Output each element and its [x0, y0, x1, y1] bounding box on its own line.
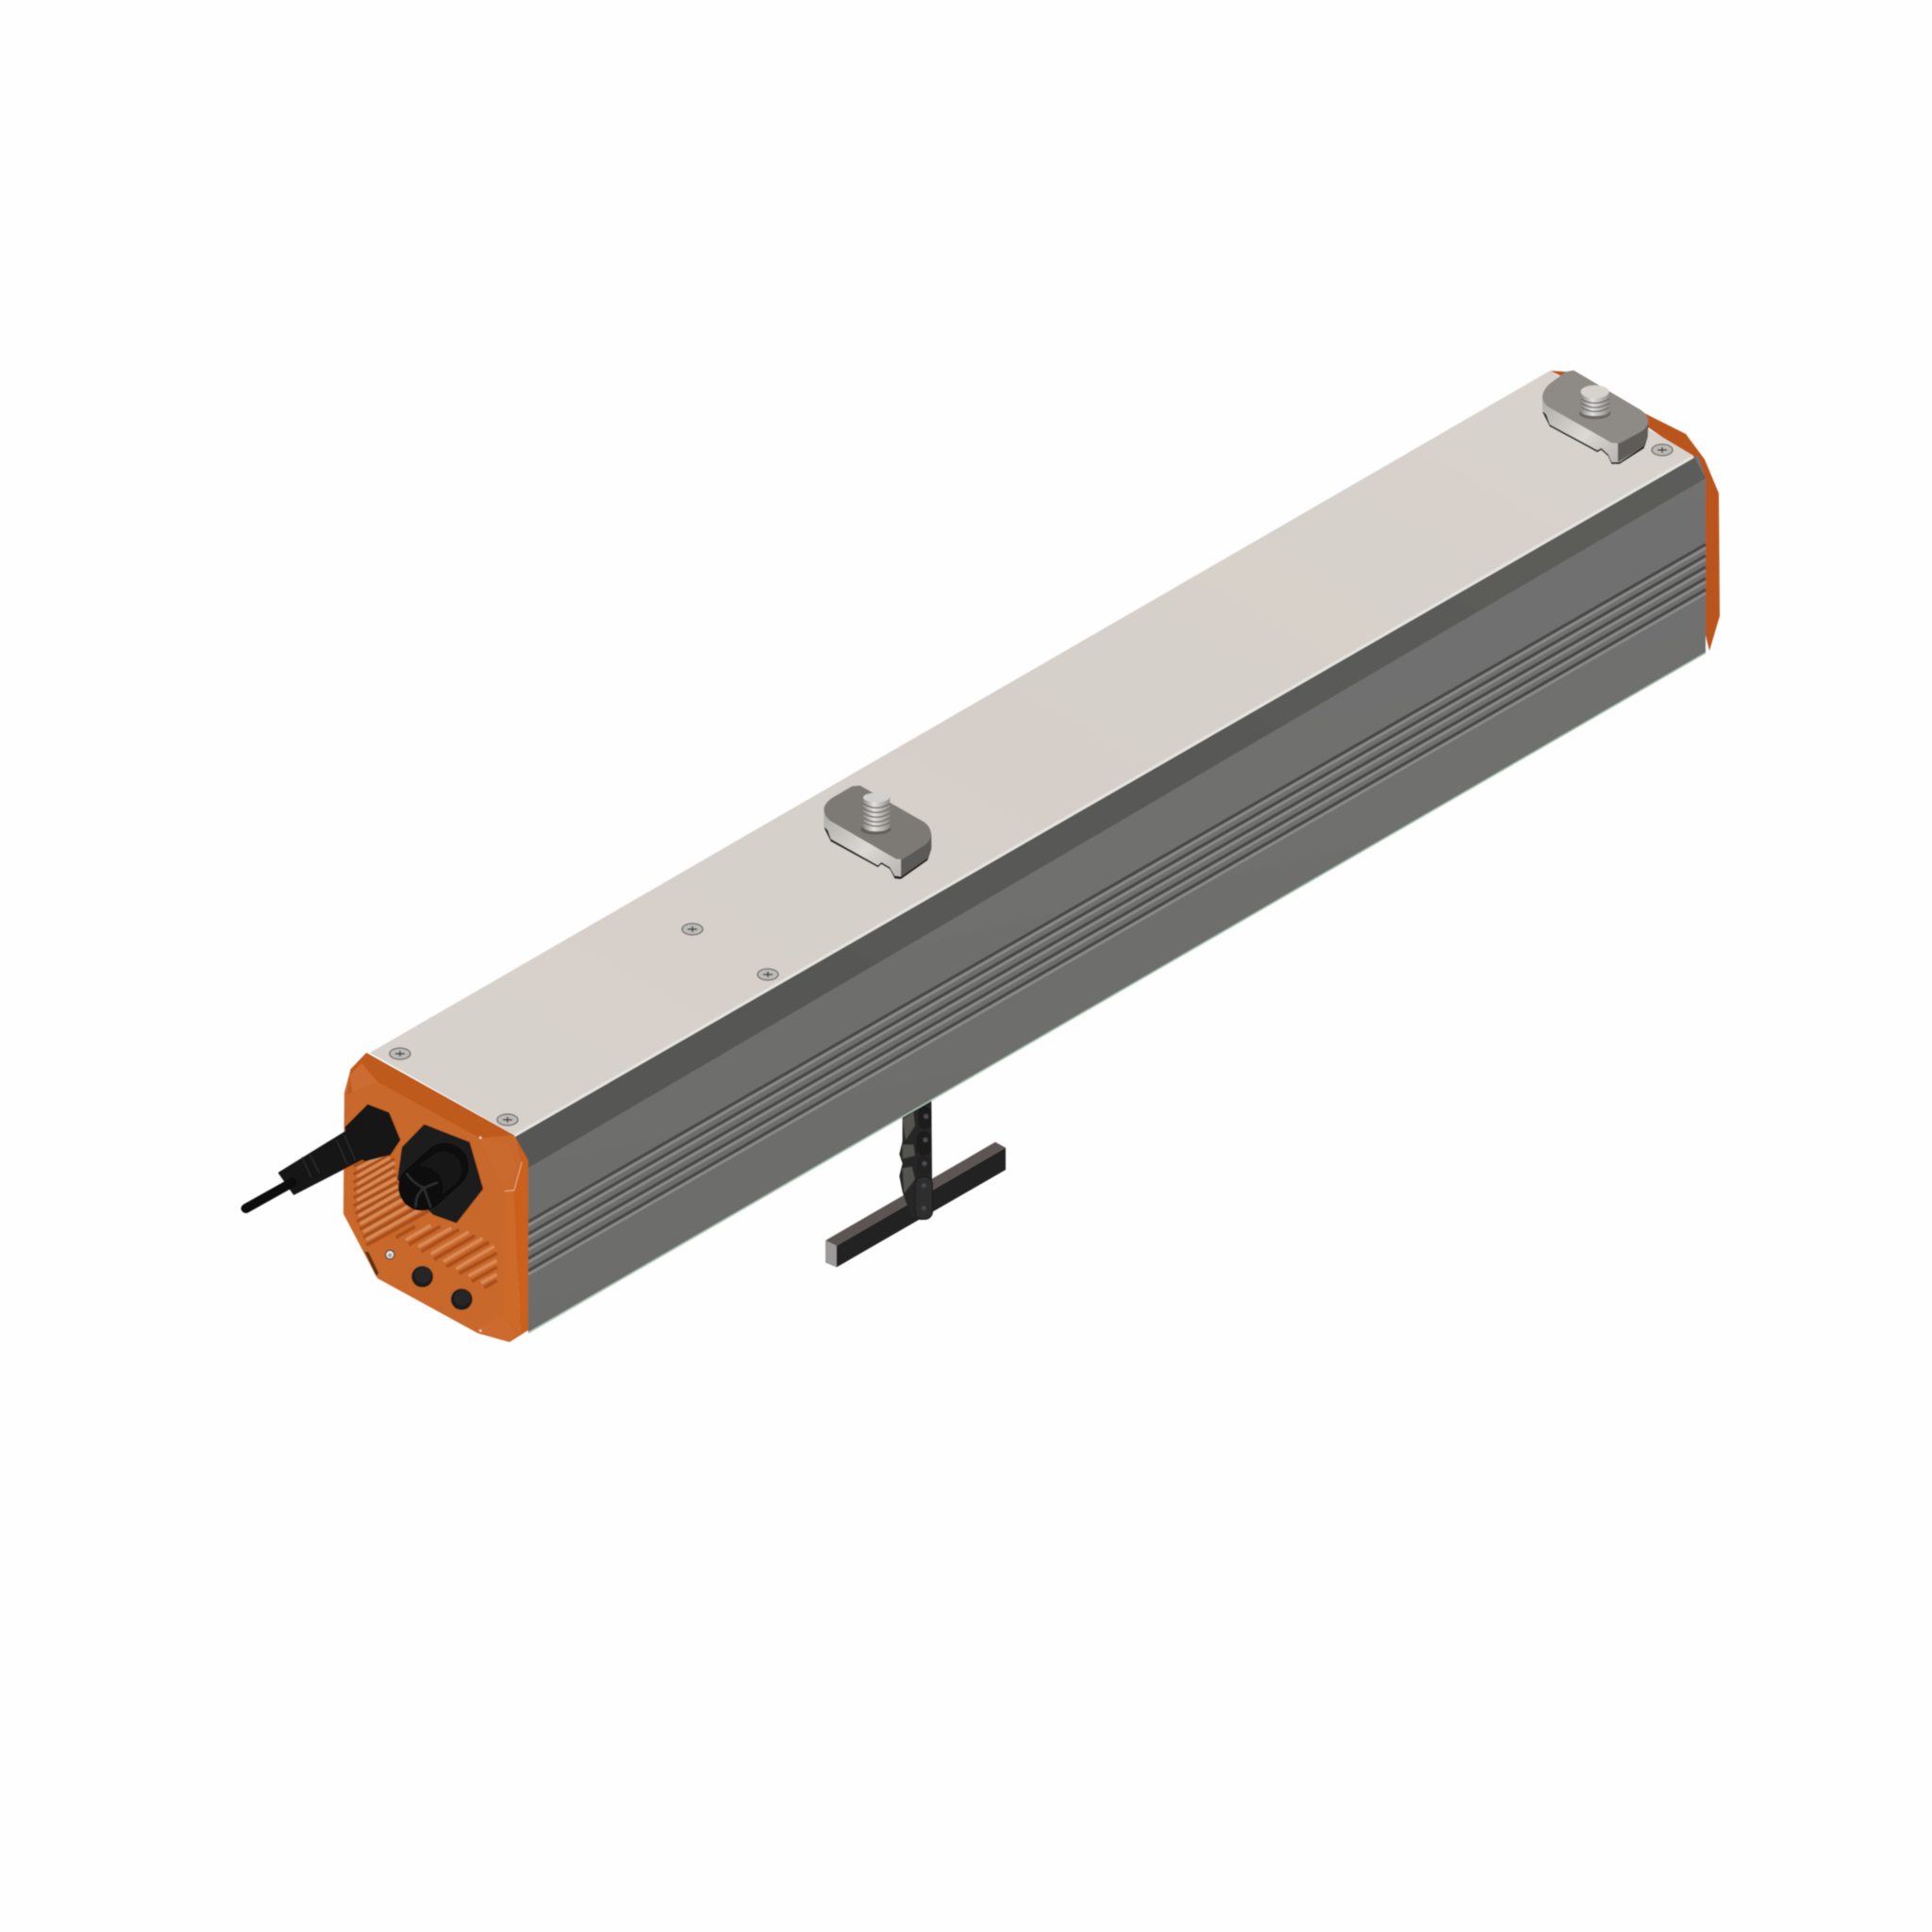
status LED	[386, 1250, 394, 1259]
vent slats upper	[354, 1151, 441, 1245]
cable plug nut	[346, 1106, 399, 1160]
mounting bracket: far	[1542, 371, 1648, 464]
corner facets	[350, 1063, 377, 1092]
cap face	[343, 1053, 522, 1342]
side grooves	[528, 544, 1706, 1274]
front end cap	[246, 1053, 528, 1342]
far end cap	[1550, 371, 1720, 651]
cable tip	[246, 1182, 292, 1208]
button two	[451, 1289, 473, 1310]
chain links	[899, 1101, 932, 1220]
housing side face	[509, 456, 1706, 1332]
vent slats lower	[396, 1225, 497, 1288]
cap inner vertical rim	[503, 1191, 521, 1333]
panel connector socket	[399, 1125, 482, 1222]
chamfer shadow	[365, 1252, 378, 1276]
T-bar top face	[825, 1142, 1006, 1246]
button one	[411, 1266, 433, 1288]
hanging chain with T-bar	[825, 1101, 1006, 1267]
dark upper bevel band	[514, 456, 1706, 1168]
cable strain relief	[279, 1129, 362, 1194]
cap raised rim	[347, 1053, 514, 1138]
top plate front edge highlight	[514, 457, 1693, 1136]
T-bar dark side	[837, 1148, 1006, 1267]
bottom edge highlight	[528, 653, 1706, 1333]
cap right strip	[509, 1135, 528, 1342]
T-bar end face	[825, 1241, 837, 1267]
top plate	[370, 371, 1693, 1135]
mounting bracket: middle	[824, 786, 931, 879]
screws on top plate	[390, 444, 1673, 1125]
